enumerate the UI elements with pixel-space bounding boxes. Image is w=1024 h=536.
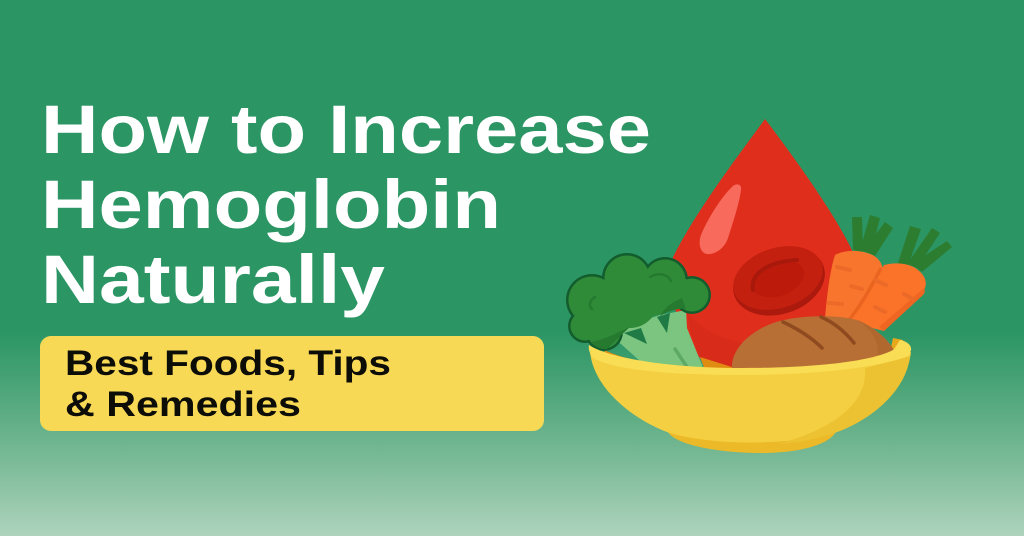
icon: carrots (825, 215, 952, 331)
title: Hemoglobin (41, 166, 501, 243)
bowl body (590, 352, 911, 442)
title (41, 91, 651, 318)
carrot left (825, 251, 883, 322)
bowl shade (778, 356, 910, 444)
subtitle badge (40, 336, 544, 431)
bowl foot (667, 430, 837, 453)
icon: bowl interior (604, 338, 903, 370)
subtitle badge: Best Foods, Tips (65, 344, 391, 383)
icon: blood drop (671, 119, 860, 372)
title: Naturally (41, 241, 385, 318)
illustration: blood drop and food bowl (566, 119, 952, 453)
carrot greens (852, 215, 952, 272)
icon: yellow bowl (589, 340, 911, 453)
carrot right (848, 263, 926, 331)
icon: red blood cell (724, 235, 834, 327)
icon: broccoli (566, 253, 711, 370)
title: How to Increase (41, 91, 651, 168)
broccoli florets (566, 253, 711, 351)
icon: bread (732, 316, 894, 372)
broccoli stem (612, 310, 704, 370)
bowl rim (589, 340, 911, 375)
subtitle badge: & Remedies (65, 385, 301, 424)
